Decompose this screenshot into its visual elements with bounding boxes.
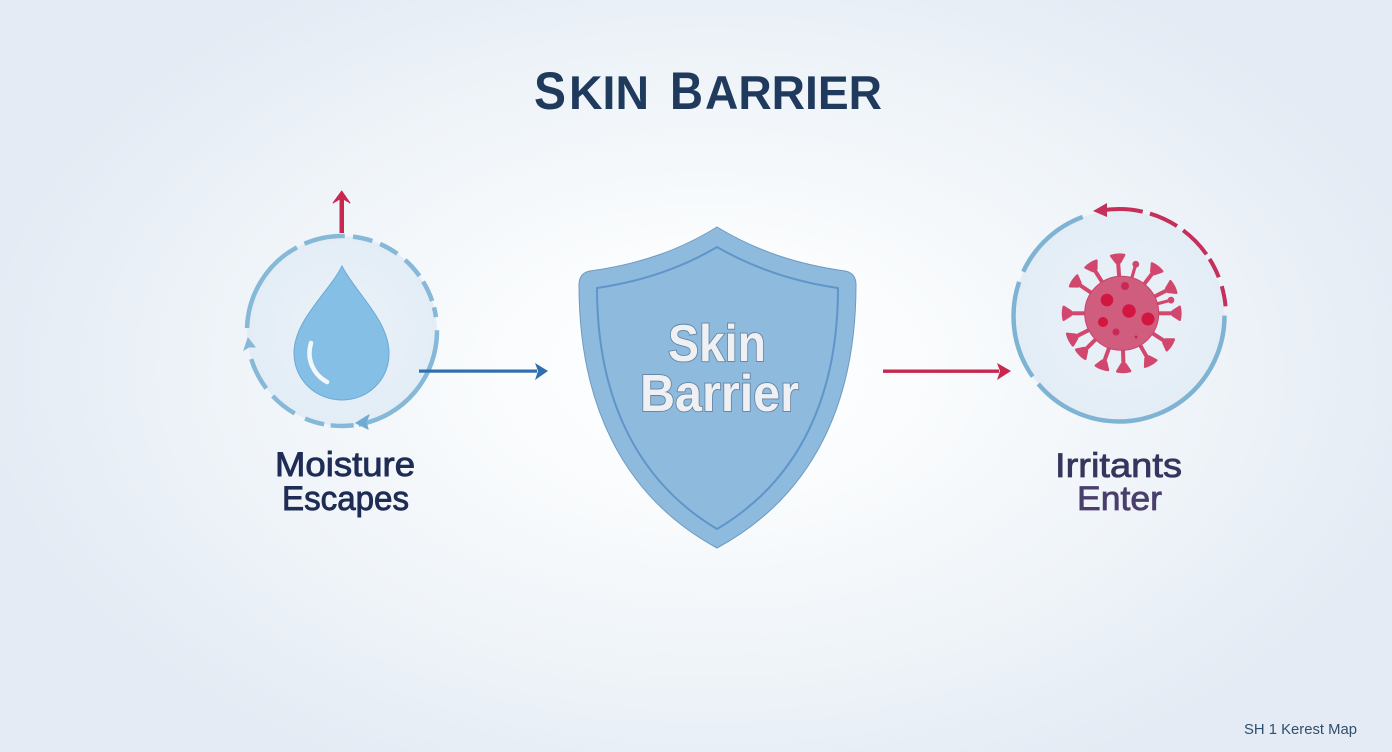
icon: dashed moisture ring (244, 236, 437, 429)
arrow: irritants incoming (883, 363, 1011, 380)
label: skin barrier: Barrier (640, 365, 799, 423)
title: KIN (569, 66, 649, 119)
icon: water drop (294, 266, 389, 400)
label: moisture escapes: Escapes (282, 480, 409, 518)
label: skin barrier: Skin (668, 315, 766, 373)
panel: shield (579, 227, 856, 548)
icon: irritants ring (1012, 203, 1226, 423)
arrow: moisture rising (333, 191, 350, 233)
panel: irritants enter (1012, 203, 1226, 518)
panel: moisture escapes (244, 191, 548, 518)
arrow: moisture to barrier (419, 363, 548, 380)
icon: shield outer (579, 227, 856, 548)
icon: shield inner line (597, 247, 838, 529)
title: S (534, 62, 566, 121)
title: B (670, 62, 703, 121)
icon: virus (1063, 254, 1180, 372)
label: irritants enter: Enter (1077, 480, 1162, 518)
footer label: SH 1 Kerest Map (1244, 722, 1357, 738)
label: irritants enter: Irritants (1055, 447, 1182, 485)
label: moisture escapes: Moisture (275, 446, 415, 484)
title: ARRIER (705, 66, 882, 119)
